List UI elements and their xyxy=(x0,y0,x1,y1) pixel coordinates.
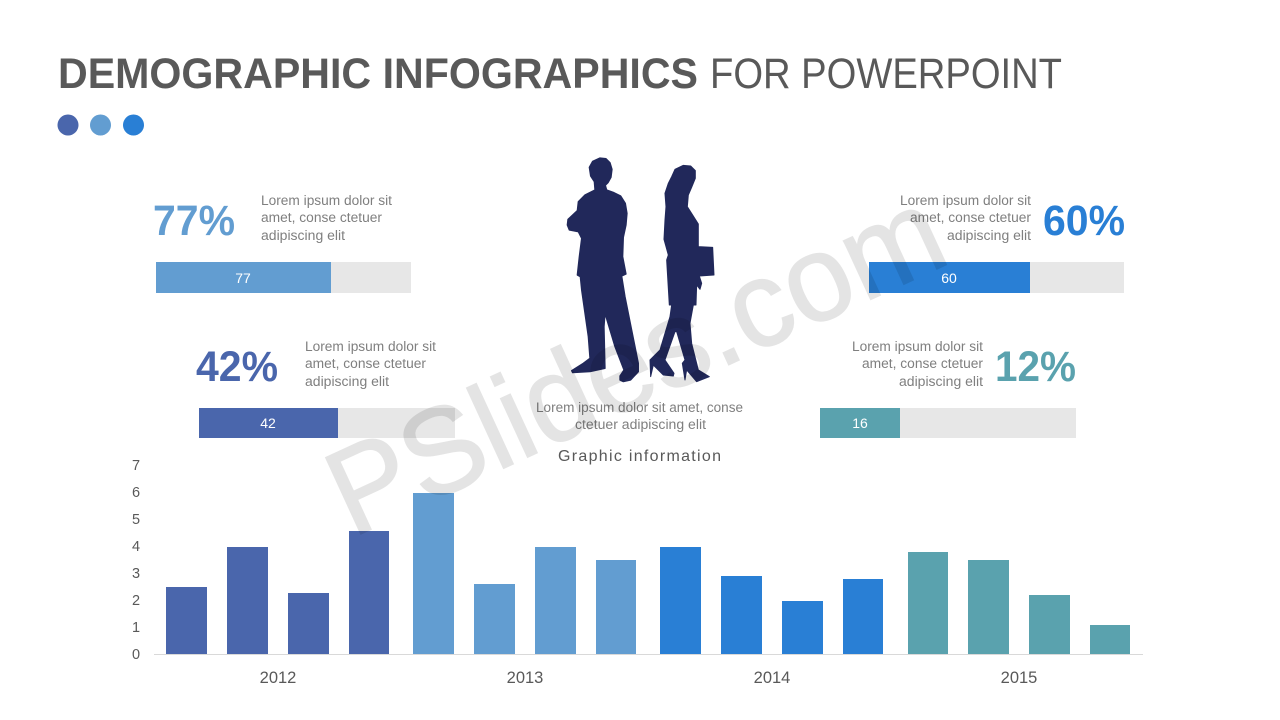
y axis labels: 4 xyxy=(132,539,140,555)
x axis year labels: 2014 xyxy=(754,669,790,687)
42% description: adipiscing elit xyxy=(305,374,389,389)
icon: businesswoman silhouette xyxy=(650,165,714,382)
panel: 42% stat xyxy=(196,339,455,438)
42% description: amet, conse ctetuer xyxy=(305,356,427,371)
77% description: amet, conse ctetuer xyxy=(261,210,383,225)
12% description: adipiscing elit xyxy=(899,374,983,389)
center caption: Lorem ipsum dolor sit amet, conse xyxy=(536,400,743,415)
title: FOR POWERPOINT xyxy=(710,50,1062,98)
42% figure: 42% xyxy=(196,343,278,391)
bars 2013 xyxy=(413,493,636,654)
panel: 77% stat xyxy=(153,193,411,293)
panel: 60% stat xyxy=(869,193,1125,293)
60% progress bar: 60 xyxy=(941,270,957,286)
center caption: ctetuer adipiscing elit xyxy=(575,417,706,432)
12% figure: 12% xyxy=(995,343,1076,391)
12% progress bar xyxy=(820,408,1076,438)
y axis labels: 3 xyxy=(132,566,140,582)
77% figure: 77% xyxy=(153,197,235,245)
42% description: Lorem ipsum dolor sit xyxy=(305,339,436,354)
y axis labels: 7 xyxy=(132,458,140,474)
77% description: Lorem ipsum dolor sit xyxy=(261,193,392,208)
60% description: amet, conse ctetuer xyxy=(910,210,1032,225)
12% description: Lorem ipsum dolor sit xyxy=(852,339,983,354)
panel: 12% stat xyxy=(820,339,1076,438)
bars 2014 xyxy=(660,547,883,654)
bar chart xyxy=(132,458,1143,687)
77% description: adipiscing elit xyxy=(261,228,345,243)
title accent dots xyxy=(58,114,144,136)
12% description: amet, conse ctetuer xyxy=(862,356,984,371)
y axis labels: 2 xyxy=(132,593,140,609)
y axis labels: 0 xyxy=(132,647,140,663)
42% progress bar xyxy=(199,408,455,438)
60% description: adipiscing elit xyxy=(947,228,1031,243)
bars 2012 xyxy=(166,531,389,654)
title: DEMOGRAPHIC INFOGRAPHICS xyxy=(58,50,698,98)
60% progress bar xyxy=(869,262,1124,293)
title xyxy=(58,50,1062,98)
42% progress bar: 42 xyxy=(260,415,276,431)
bars 2015 xyxy=(908,552,1130,654)
x axis line xyxy=(154,654,1143,655)
y axis labels: 6 xyxy=(132,485,140,501)
y axis labels: 1 xyxy=(132,620,140,636)
77% progress bar xyxy=(156,262,411,293)
77% progress bar: 77 xyxy=(235,270,251,286)
icon: businessman silhouette xyxy=(567,158,638,382)
chart title: Graphic information xyxy=(558,448,721,465)
60% figure: 60% xyxy=(1043,197,1125,245)
y axis labels: 5 xyxy=(132,512,140,528)
y axis labels xyxy=(132,458,140,663)
x axis year labels: 2015 xyxy=(1001,669,1037,687)
watermark: PSlides.com xyxy=(306,161,964,562)
60% description: Lorem ipsum dolor sit xyxy=(900,193,1031,208)
x axis year labels: 2012 xyxy=(260,669,296,687)
x axis year labels: 2013 xyxy=(507,669,543,687)
x axis year labels xyxy=(260,669,1037,687)
12% progress bar: 16 xyxy=(852,415,868,431)
